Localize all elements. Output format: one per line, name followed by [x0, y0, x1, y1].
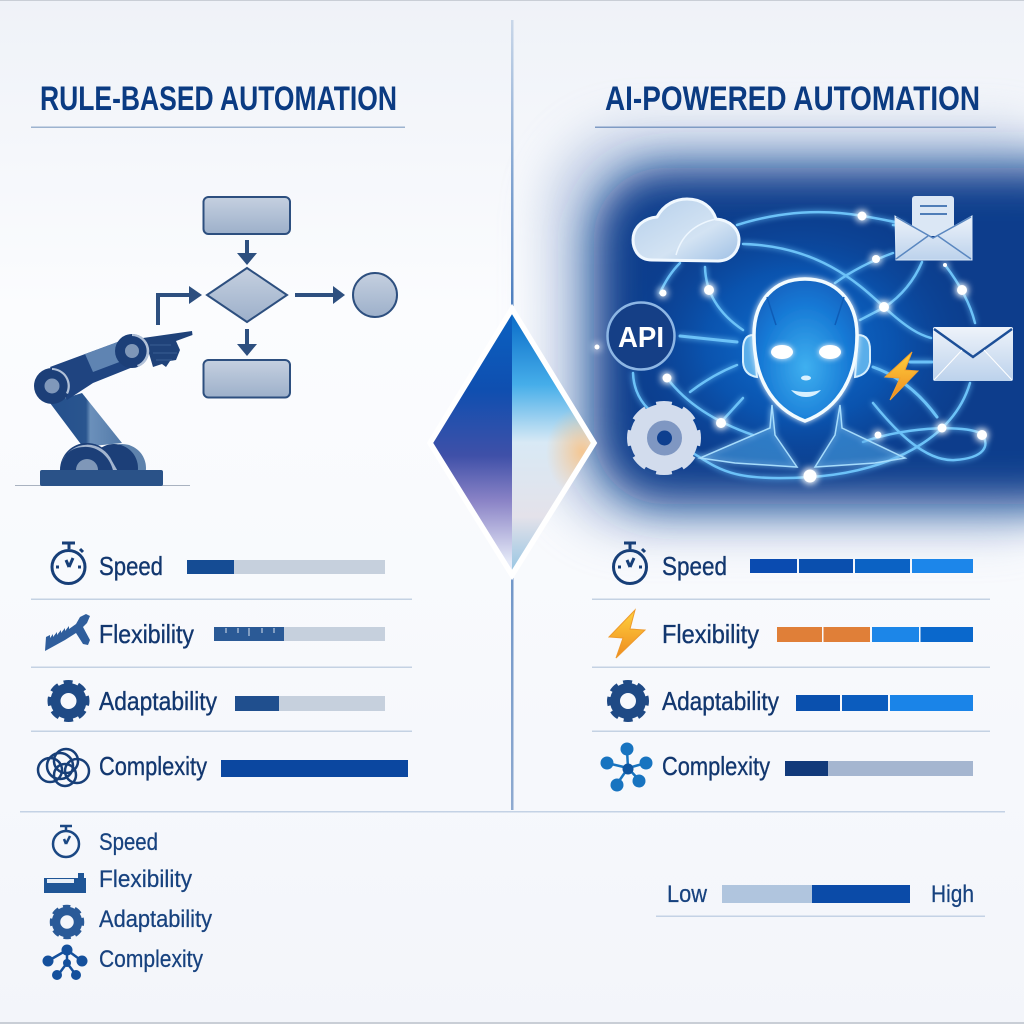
- icon: AI humanoid: [700, 279, 905, 467]
- legend: adaptability: [52, 906, 212, 937]
- network lines: [633, 212, 985, 478]
- icon: robot arm: [15, 331, 192, 497]
- flowchart decision diamond: [207, 268, 287, 322]
- row: flexibility: Flexibility: [662, 619, 759, 649]
- arrow: bottom from diamond: [237, 329, 257, 356]
- legend: speed: Speed: [99, 829, 158, 856]
- icon: gear: [50, 682, 87, 720]
- flowchart: [156, 197, 397, 398]
- icon: gear: [631, 405, 697, 471]
- AI eyes: [771, 345, 841, 359]
- legend: speed: [53, 826, 158, 857]
- legend: flexibility: Flexibility: [99, 866, 192, 893]
- row: adaptability: [610, 682, 973, 720]
- arrow: right to circle: [295, 286, 345, 304]
- icon: stopwatch: [52, 543, 85, 584]
- legend: adaptability: Adaptability: [99, 906, 212, 933]
- legend: flexibility: [44, 866, 192, 893]
- row: adaptability: Adaptability: [99, 686, 217, 716]
- flowchart start box: [204, 197, 290, 234]
- flowchart end circle: [353, 273, 397, 317]
- row: flexibility: [609, 610, 973, 658]
- icon: stopwatch: [614, 543, 646, 584]
- legend scale: low to high: [656, 881, 985, 917]
- legend scale: low to high: Low: [667, 881, 708, 908]
- icon: network: [600, 742, 652, 792]
- icon: open envelope: [895, 196, 972, 260]
- panel: legend icons and labels: [42, 826, 212, 980]
- flowchart bottom box: [204, 360, 290, 398]
- icon: closed envelope: [933, 327, 1013, 381]
- row: complexity: [38, 749, 408, 786]
- panel: AI glow backdrop: [545, 125, 1024, 535]
- row: complexity: [600, 742, 973, 792]
- icon: API badge: [608, 302, 674, 370]
- icon: lightning: [609, 610, 645, 658]
- row: adaptability: [50, 682, 385, 720]
- row: complexity: Complexity: [99, 751, 207, 781]
- arrow: elbow into diamond: [156, 286, 202, 325]
- icon: tangled circles: [38, 749, 89, 786]
- row: speed: [52, 543, 385, 584]
- AI ears: [743, 335, 870, 377]
- AI forehead lines: [767, 297, 844, 325]
- center diamond: [430, 309, 618, 575]
- legend: complexity: [42, 944, 203, 980]
- icon: bent ruler: [45, 614, 90, 651]
- AI shoulders: [700, 405, 905, 467]
- icon: cloud: [633, 199, 739, 261]
- panel: rule-based metrics: [31, 543, 412, 786]
- center divider: [511, 20, 514, 810]
- row: complexity: Complexity: [662, 751, 770, 781]
- icon: API badge: API: [618, 322, 664, 354]
- heading: rule-based: RULE-BASED AUTOMATION: [40, 80, 397, 118]
- icon: lightning: [885, 352, 918, 400]
- row: flexibility: [45, 614, 385, 651]
- AI face: [754, 279, 857, 421]
- panel: AI metrics: [592, 543, 990, 792]
- legend scale: low to high: High: [931, 881, 974, 908]
- row: flexibility: Flexibility: [99, 619, 194, 649]
- row: adaptability: Adaptability: [662, 686, 779, 716]
- icon: gear: [610, 682, 646, 720]
- row: speed: Speed: [662, 551, 727, 581]
- row: speed: [614, 543, 973, 584]
- AI nose and mouth: [791, 376, 821, 397]
- legend: complexity: Complexity: [99, 946, 203, 973]
- row: speed: Speed: [99, 551, 163, 581]
- arrow: top to diamond: [237, 240, 257, 265]
- network nodes: [594, 212, 987, 482]
